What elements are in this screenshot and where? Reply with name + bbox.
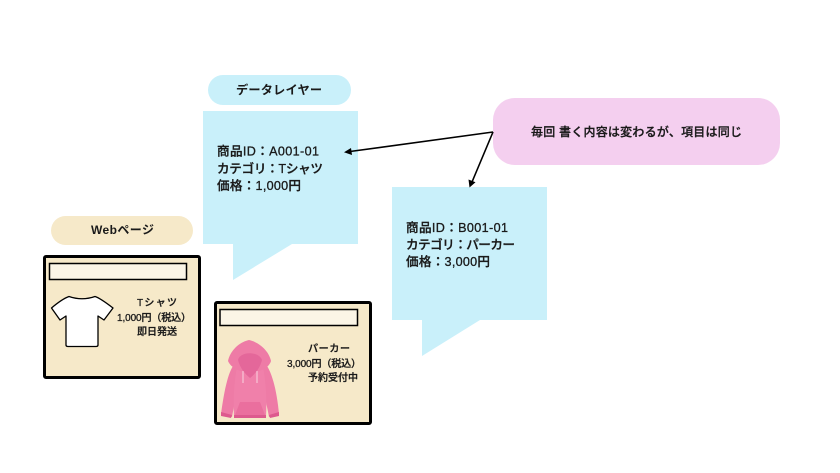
speech bubble: データレイヤー A001-01: 商品ID：A001-01 bbox=[217, 144, 319, 158]
icon: pink hoodie bbox=[221, 340, 279, 418]
sleeves bbox=[221, 362, 240, 417]
drawstrings bbox=[243, 371, 257, 383]
label: Webページ bbox=[51, 216, 193, 245]
speech bubble: データレイヤー B001-01: カテゴリ：パーカー bbox=[406, 237, 515, 252]
product text: 即日発送 bbox=[137, 325, 177, 338]
hood bbox=[228, 340, 271, 373]
speech bubble: データレイヤー B001-01: 価格：3,000円 bbox=[406, 255, 490, 269]
product text bbox=[287, 343, 361, 384]
hem and cuffs bbox=[221, 412, 279, 418]
speech bubble: データレイヤー A001-01: 価格：1,000円 bbox=[217, 179, 301, 193]
panel: Tシャツ web page bbox=[44, 256, 200, 378]
product text: Tシャツ bbox=[137, 298, 177, 309]
speech bubble: データレイヤー A001-01: カテゴリ：Tシャツ bbox=[217, 161, 323, 176]
panel: パーカー web page bbox=[216, 302, 370, 424]
label: Webページ: Webページ bbox=[91, 223, 154, 237]
arrow: to A001-01 bubble bbox=[344, 132, 493, 155]
icon: T-shirt bbox=[52, 296, 113, 346]
product text: 1,000円（税込） bbox=[117, 311, 191, 324]
label: データレイヤー bbox=[208, 75, 351, 105]
callout: 毎回書く内容は変わるが、項目は同じ bbox=[493, 98, 780, 165]
product text bbox=[117, 298, 191, 338]
speech bubble: データレイヤー B001-01: 商品ID：B001-01 bbox=[406, 220, 508, 235]
callout: 毎回書く内容は変わるが、項目は同じ: 毎回 書く内容は変わるが、項目は同じ bbox=[531, 124, 742, 139]
address bar bbox=[50, 264, 186, 280]
hood opening bbox=[238, 353, 262, 378]
label: データレイヤー: データレイヤー bbox=[236, 82, 322, 97]
pocket bbox=[235, 402, 265, 415]
speech bubble: データレイヤー B001-01 bbox=[392, 187, 547, 356]
speech bubble: データレイヤー A001-01 bbox=[203, 111, 358, 280]
product text: パーカー bbox=[308, 343, 350, 355]
product text: 予約受付中 bbox=[308, 371, 358, 384]
body bbox=[234, 362, 266, 417]
address bar bbox=[220, 310, 358, 326]
product text: 3,000円（税込） bbox=[287, 357, 361, 370]
arrow: to B001-01 bubble bbox=[468, 132, 493, 188]
